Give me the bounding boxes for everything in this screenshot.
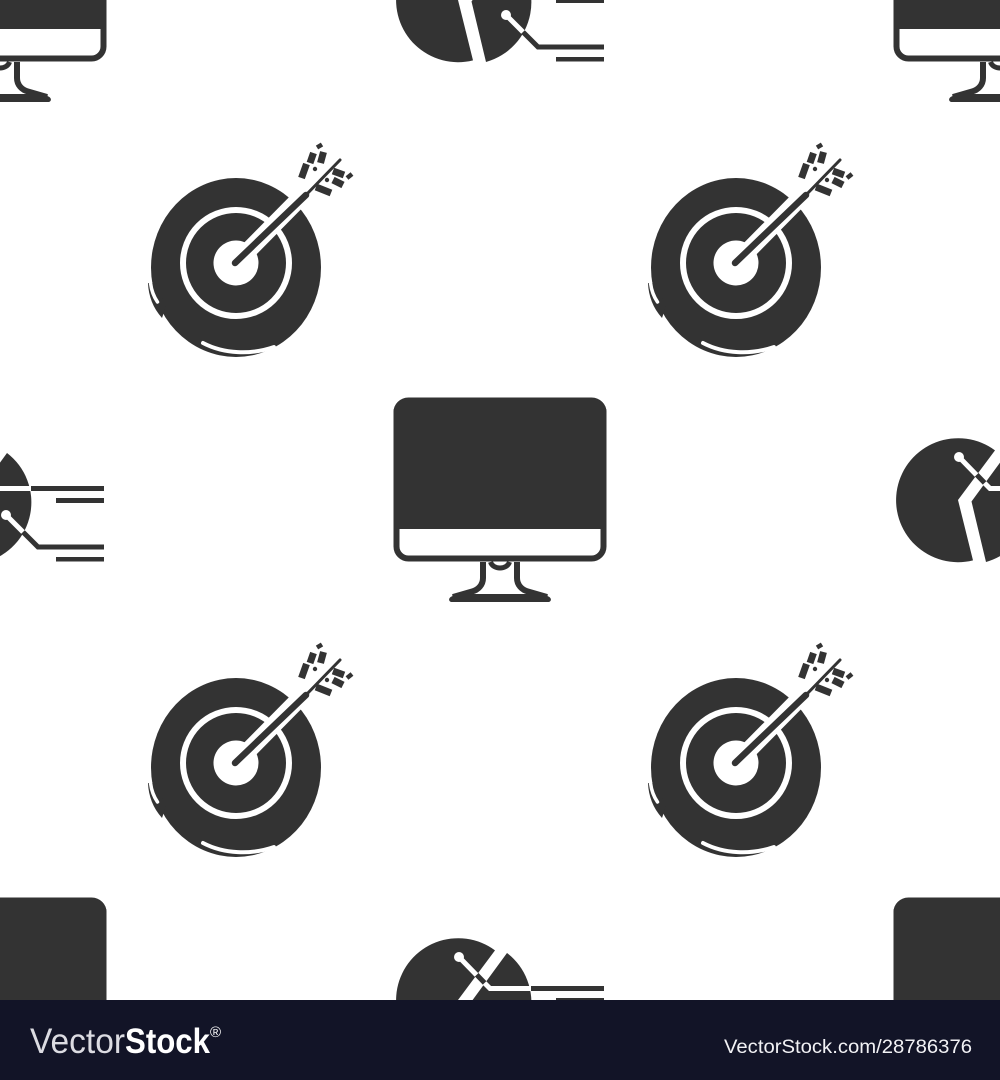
footer logo xyxy=(30,1022,221,1061)
footer image id: VectorStock.com/28786376 xyxy=(724,1037,972,1058)
icon: pie chart middle right xyxy=(896,438,1000,562)
icon: monitor bottom left xyxy=(0,898,107,1080)
icon: target bottom right xyxy=(648,644,852,857)
footer logo: ® xyxy=(210,1024,221,1041)
footer logo: Stock xyxy=(125,1022,210,1061)
icon: target bottom left xyxy=(148,644,352,857)
footer logo: Vector xyxy=(30,1022,125,1061)
icon: pie chart middle left xyxy=(0,438,104,562)
icon: monitor centre xyxy=(394,398,606,602)
icon: pie chart bottom centre xyxy=(396,938,604,1062)
footer bar xyxy=(0,1000,1000,1080)
icon: monitor bottom right xyxy=(894,898,1000,1080)
icon: target top right xyxy=(648,144,852,357)
icon: pie chart top centre xyxy=(396,0,604,62)
icon: target top left xyxy=(148,144,352,357)
icon: monitor top right xyxy=(894,0,1000,102)
icon: monitor top left xyxy=(0,0,107,102)
